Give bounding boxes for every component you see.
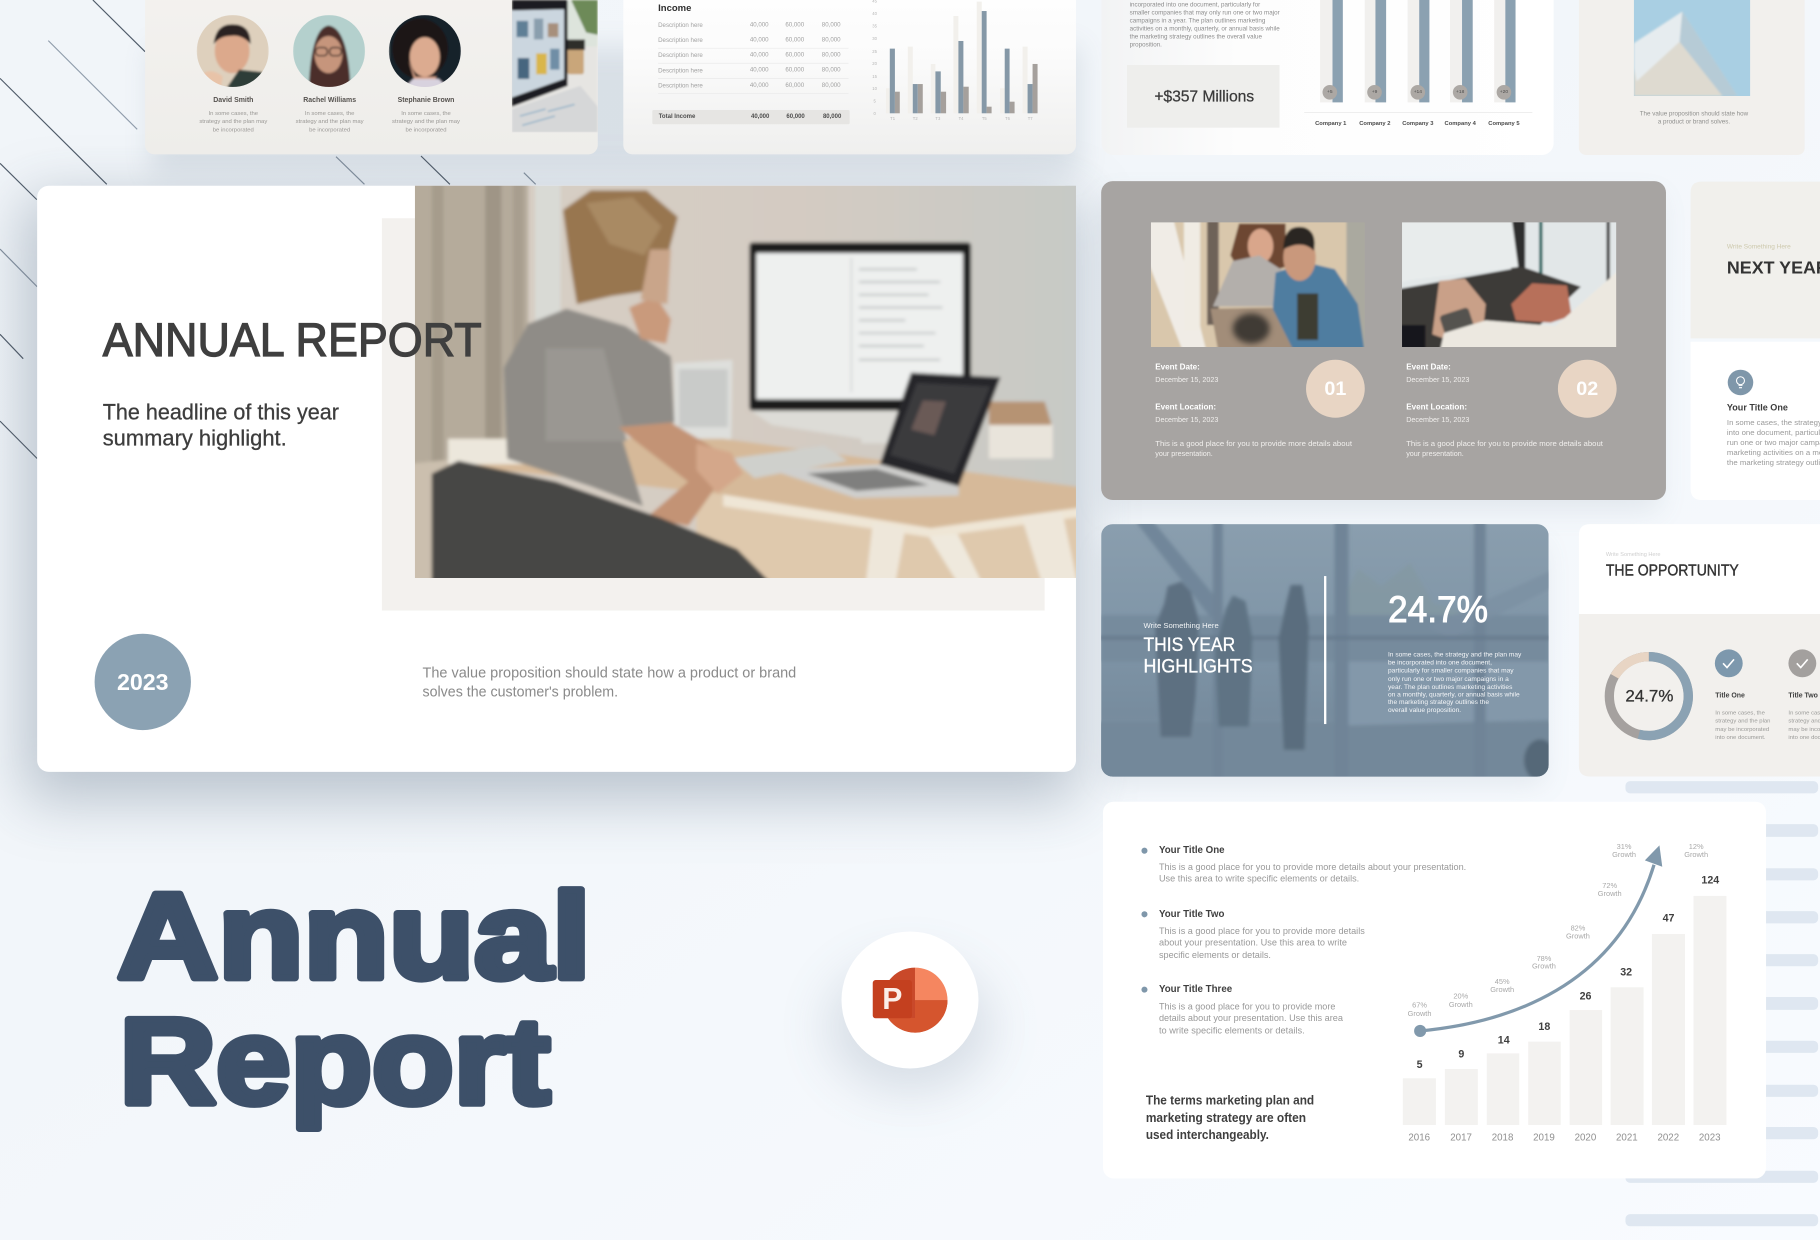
- heading: HIGHLIGHTS: [1144, 656, 1253, 678]
- closing statement: marketing strategy are often: [1146, 1110, 1306, 1125]
- year badge: [95, 634, 191, 730]
- donut value: 24.7%: [1625, 687, 1673, 706]
- team descriptions: In some cases, the: [401, 111, 451, 117]
- team names: Stephanie Brown: [398, 97, 454, 104]
- item 1: [1141, 845, 1466, 885]
- hand at chin: [629, 296, 671, 344]
- big heading: [117, 868, 591, 1129]
- item body: [1727, 418, 1820, 467]
- team descriptions: In some cases, the: [305, 111, 355, 117]
- beige backing block: [382, 218, 1045, 611]
- item 1: This is a good place for you to provide more details about your presentation.: [1159, 862, 1466, 873]
- photo: silhouettes in office: [1091, 517, 1557, 786]
- body text: on a monthly, quarterly, or annual basis while: [1388, 692, 1520, 699]
- growth labels: Growth: [1449, 1000, 1473, 1009]
- team descriptions: be incorporated: [213, 127, 254, 133]
- heading: THE OPPORTUNITY: [1606, 563, 1739, 580]
- income bar chart: T1: [890, 116, 896, 121]
- income table: 60,000: [785, 37, 805, 44]
- eyebrow: Write Something Here: [1727, 244, 1791, 251]
- panel: this year highlights slide: [1091, 517, 1557, 786]
- income table: 40,000: [750, 37, 769, 44]
- event 02 details: [1406, 363, 1603, 458]
- growth bar chart: 18: [1538, 1021, 1550, 1033]
- team descriptions: In some cases, the: [209, 111, 259, 117]
- growth labels: 12%: [1689, 842, 1704, 851]
- event 01 details: your presentation.: [1155, 449, 1213, 458]
- body text: In some cases, the strategy and the plan may: [1388, 651, 1522, 658]
- event 02 details: Event Location:: [1406, 403, 1467, 412]
- background shadows: [23, 46, 1660, 801]
- body text: smaller companies that may only run one or two major: [1130, 10, 1280, 17]
- year badge: 2023: [117, 669, 169, 695]
- income table: 80,000: [823, 114, 842, 120]
- growth bar chart: 5: [1417, 1059, 1423, 1071]
- item 3: This is a good place for you to provide more: [1159, 1002, 1335, 1013]
- closing statement: used interchangeably.: [1146, 1127, 1269, 1142]
- heading: [1144, 634, 1253, 678]
- income table: 60,000: [785, 21, 805, 28]
- income bar chart: 10: [872, 86, 878, 91]
- income table: 80,000: [822, 52, 841, 59]
- income bar chart: 20: [872, 61, 878, 66]
- desk: [448, 439, 1091, 528]
- growth bar chart: 2016: [1408, 1132, 1430, 1143]
- closing statement: The terms marketing plan and: [1146, 1093, 1314, 1108]
- income bar chart: 25: [872, 49, 878, 54]
- income table: Description here: [658, 37, 703, 44]
- back laptop: [674, 360, 732, 453]
- growth bar chart: 2017: [1450, 1132, 1472, 1143]
- body text: [1130, 1, 1280, 49]
- item 1: Your Title One: [1159, 845, 1225, 856]
- wall below desk: [696, 492, 1076, 578]
- front laptop: [880, 373, 1001, 486]
- income bar chart: T6: [1005, 116, 1011, 121]
- body text: overall value proposition.: [1388, 707, 1461, 714]
- body text: only run one or two major campaigns in a: [1388, 676, 1509, 683]
- growth bar chart: [1403, 874, 1726, 1143]
- item 3: Your Title Three: [1159, 984, 1233, 995]
- icon: PowerPoint: P: [882, 983, 902, 1016]
- event 01 details: This is a good place for you to provide more details about: [1155, 439, 1352, 448]
- divider: [1324, 576, 1326, 724]
- income table: 80,000: [822, 82, 841, 89]
- photo: man at desk: [406, 174, 1091, 592]
- item titles: [1715, 693, 1818, 700]
- income table: 40,000: [750, 82, 769, 89]
- income table: 40,000: [750, 67, 769, 74]
- t-shirt: [504, 309, 674, 506]
- growth arrow: [1414, 847, 1662, 1037]
- income table: Description here: [658, 67, 703, 74]
- main title: ANNUAL REPORT: [103, 314, 482, 367]
- big heading: Report: [120, 993, 550, 1129]
- growth labels: Growth: [1598, 889, 1622, 898]
- growth bar chart: 9: [1458, 1048, 1464, 1060]
- income table: 80,000: [822, 21, 841, 28]
- team names: Rachel Williams: [303, 97, 356, 104]
- item 2: This is a good place for you to provide more details: [1159, 926, 1365, 937]
- stat: 24.7%: 24.7%: [1388, 588, 1488, 630]
- income table: 40,000: [750, 52, 769, 59]
- income bar chart: 0: [873, 111, 876, 116]
- event 01 details: [1155, 363, 1352, 458]
- income table: 80,000: [822, 67, 841, 74]
- avatar: Stephanie Brown: [389, 14, 462, 88]
- panel: company comparison slide: [1102, 0, 1554, 155]
- growth bar chart: 2018: [1492, 1132, 1513, 1143]
- income heading: Income: [658, 3, 691, 14]
- event 02 details: December 15, 2023: [1406, 375, 1469, 384]
- growth bar chart: 32: [1620, 967, 1632, 979]
- avatar: Rachel Williams: [292, 14, 366, 88]
- number badge 01: 01: [1324, 378, 1346, 400]
- event 01 details: Event Date:: [1155, 363, 1200, 372]
- item 3: to write specific elements or details.: [1159, 1025, 1305, 1036]
- team names: David Smith: [213, 97, 253, 104]
- event 02 details: December 15, 2023: [1406, 415, 1469, 424]
- income table: 60,000: [785, 52, 805, 59]
- photo: two colleagues at laptop: [1151, 222, 1364, 347]
- event 02 details: This is a good place for you to provide more details about: [1406, 439, 1603, 448]
- growth labels: Growth: [1684, 850, 1708, 859]
- item 2: specific elements or details.: [1159, 950, 1271, 961]
- item text: may be incorporated: [1715, 727, 1769, 733]
- company bars: +14: [1414, 89, 1422, 95]
- income bar chart: T3: [935, 116, 941, 121]
- background diagonal lines: [0, 0, 536, 458]
- company bars: Company 2: [1359, 121, 1390, 127]
- income table: 40,000: [751, 114, 770, 120]
- growth labels: Growth: [1532, 961, 1556, 970]
- company bars: +9: [1372, 89, 1378, 95]
- desk box: [989, 424, 1053, 458]
- growth bar chart: 124: [1701, 874, 1719, 886]
- item 3: details about your presentation. Use this area: [1159, 1013, 1344, 1024]
- company bars: Company 4: [1445, 121, 1477, 127]
- panel: growth slide: [1103, 802, 1766, 1178]
- heading: THIS YEAR: [1144, 634, 1235, 656]
- growth labels: 31%: [1617, 842, 1632, 851]
- icon: light bulb: [1728, 370, 1753, 395]
- growth bar chart: 14: [1498, 1034, 1510, 1046]
- big heading: Annual: [117, 868, 591, 1004]
- growth labels: 82%: [1571, 923, 1586, 932]
- subtitle: summary highlight.: [103, 426, 287, 451]
- value proposition text: The value proposition should state how a product or brand: [423, 665, 796, 682]
- photo: hands typing: [1402, 222, 1616, 347]
- company bars: Company 3: [1402, 121, 1434, 127]
- company bars: [1304, 0, 1532, 127]
- growth bar chart: 2023: [1699, 1132, 1721, 1143]
- item text: strategy and the plan: [1715, 719, 1770, 725]
- income bar chart: 30: [872, 36, 878, 41]
- income bar chart: 5: [873, 98, 876, 103]
- caption: a product or brand solves.: [1658, 118, 1730, 125]
- item text: [1715, 711, 1820, 741]
- income table: 40,000: [750, 21, 769, 28]
- check icon 2: [1788, 649, 1816, 677]
- body text: activities on a monthly, quarterly, or annual basis while: [1130, 26, 1280, 33]
- stat callout: [1127, 65, 1280, 128]
- event 02 details: your presentation.: [1406, 449, 1464, 458]
- panel: event slide: [1101, 181, 1666, 500]
- growth labels: 67%: [1412, 1000, 1427, 1009]
- value proposition text: solves the customer's problem.: [423, 683, 618, 700]
- avatar: David Smith: [196, 14, 269, 88]
- icon: PowerPoint: [829, 931, 991, 1091]
- growth labels: Growth: [1408, 1009, 1431, 1018]
- stat callout: +$357 Millions: [1154, 89, 1254, 106]
- income table: Total Income: [659, 114, 696, 120]
- income bar chart: 40: [872, 11, 878, 16]
- donut chart: [1609, 657, 1688, 736]
- panel: team slide: [145, 0, 598, 154]
- eyebrow: Write Something Here: [1606, 552, 1660, 558]
- item 1: Use this area to write specific elements or details.: [1159, 874, 1359, 885]
- growth labels: 20%: [1453, 991, 1469, 1000]
- income bar chart: [872, 0, 1038, 121]
- income table: Description here: [658, 82, 703, 89]
- body text: [1388, 651, 1522, 714]
- team descriptions: be incorporated: [309, 127, 350, 133]
- growth labels: [1408, 842, 1708, 1018]
- income bar chart: T4: [959, 116, 964, 121]
- item 2: Your Title Two: [1159, 909, 1224, 920]
- growth labels: 78%: [1537, 954, 1552, 963]
- growth labels: Growth: [1490, 985, 1514, 994]
- team descriptions: strategy and the plan may: [392, 119, 460, 125]
- income table: 80,000: [822, 37, 841, 44]
- income bar chart: 15: [872, 74, 878, 79]
- income table: 60,000: [785, 67, 805, 74]
- income table: 60,000: [786, 114, 805, 120]
- chair: [430, 458, 769, 578]
- growth labels: Growth: [1612, 850, 1636, 859]
- team descriptions: [199, 111, 460, 133]
- company bars: Company 1: [1315, 121, 1347, 127]
- item titles: Title One: [1715, 693, 1745, 700]
- body text: year. The plan outlines marketing activities: [1388, 684, 1513, 691]
- event 01 details: December 15, 2023: [1155, 375, 1218, 384]
- income table: [652, 21, 850, 124]
- panel: value proposition slide: [1579, 0, 1805, 155]
- income table: Description here: [658, 52, 703, 59]
- body text: incorporated into one document, particularly for: [1130, 1, 1260, 8]
- body text: particularly for smaller companies that may: [1388, 667, 1514, 674]
- growth labels: Growth: [1566, 932, 1590, 941]
- caption: The value proposition should state how: [1640, 110, 1749, 117]
- value proposition text: [422, 665, 796, 700]
- team descriptions: strategy and the plan may: [199, 119, 267, 125]
- item 2: about your presentation. Use this area to write: [1159, 937, 1347, 948]
- income bar chart: T7: [1028, 116, 1033, 121]
- growth labels: 45%: [1495, 977, 1510, 986]
- eyebrow: Write Something Here: [1144, 621, 1219, 630]
- body text: the marketing strategy outlines the: [1388, 699, 1489, 706]
- check icon 1: [1715, 649, 1743, 677]
- papers on desk: [731, 446, 847, 478]
- hair: [563, 190, 678, 304]
- income table: 60,000: [785, 82, 805, 89]
- growth bar chart: 2021: [1616, 1132, 1638, 1143]
- monitor: [749, 242, 971, 411]
- item text: In some cases, the: [1715, 711, 1766, 717]
- photo: building: [1634, 0, 1750, 96]
- company bars: +18: [1456, 89, 1465, 95]
- arm: [619, 420, 714, 528]
- closing statement: [1146, 1093, 1314, 1142]
- company bars: +20: [1500, 89, 1508, 95]
- body text: the marketing strategy outlines the overall value: [1130, 34, 1262, 41]
- company bars: +5: [1327, 89, 1333, 95]
- body text: proposition.: [1130, 42, 1162, 49]
- number badge 02: [1558, 360, 1617, 418]
- caption: [1640, 110, 1749, 125]
- team names: [213, 97, 454, 104]
- team descriptions: be incorporated: [405, 127, 447, 133]
- growth bar chart: 2022: [1657, 1132, 1679, 1143]
- event 02 details: Event Date:: [1406, 363, 1451, 372]
- growth bar chart: 2020: [1575, 1132, 1597, 1143]
- income bar chart: 35: [872, 24, 878, 29]
- item 3: [1141, 984, 1344, 1036]
- item 2: [1141, 909, 1365, 961]
- panel: main annual report slide: [37, 174, 1091, 772]
- body text: be incorporated into one document,: [1388, 659, 1492, 666]
- panel: income slide: [623, 0, 1076, 154]
- item titles: Title Two: [1788, 693, 1818, 700]
- number badge 02: 02: [1576, 378, 1598, 400]
- growth bar chart: 47: [1663, 913, 1675, 925]
- subtitle: [103, 400, 339, 451]
- panel: next year slide: [1691, 182, 1820, 500]
- income table: Description here: [658, 22, 703, 29]
- event 01 details: December 15, 2023: [1155, 415, 1218, 424]
- company bars: Company 5: [1488, 121, 1520, 127]
- photo: laptop on desk: [512, 0, 598, 132]
- item title: Your Title One: [1727, 402, 1788, 412]
- income bar chart: T5: [982, 116, 987, 121]
- background stripes: [1625, 781, 1818, 1226]
- number badge 01: [1306, 360, 1365, 418]
- subtitle: The headline of this year: [103, 400, 339, 425]
- body text: campaigns in a year. The plan outlines marketing: [1130, 18, 1266, 25]
- growth labels: 72%: [1602, 881, 1618, 890]
- team descriptions: strategy and the plan may: [296, 119, 364, 125]
- growth bar chart: 26: [1580, 991, 1592, 1003]
- event 01 details: Event Location:: [1155, 403, 1216, 412]
- income bar chart: T2: [913, 116, 918, 121]
- panel: the opportunity slide: [1579, 524, 1820, 777]
- item text: into one document.: [1715, 735, 1766, 741]
- growth bar chart: 2019: [1533, 1132, 1555, 1143]
